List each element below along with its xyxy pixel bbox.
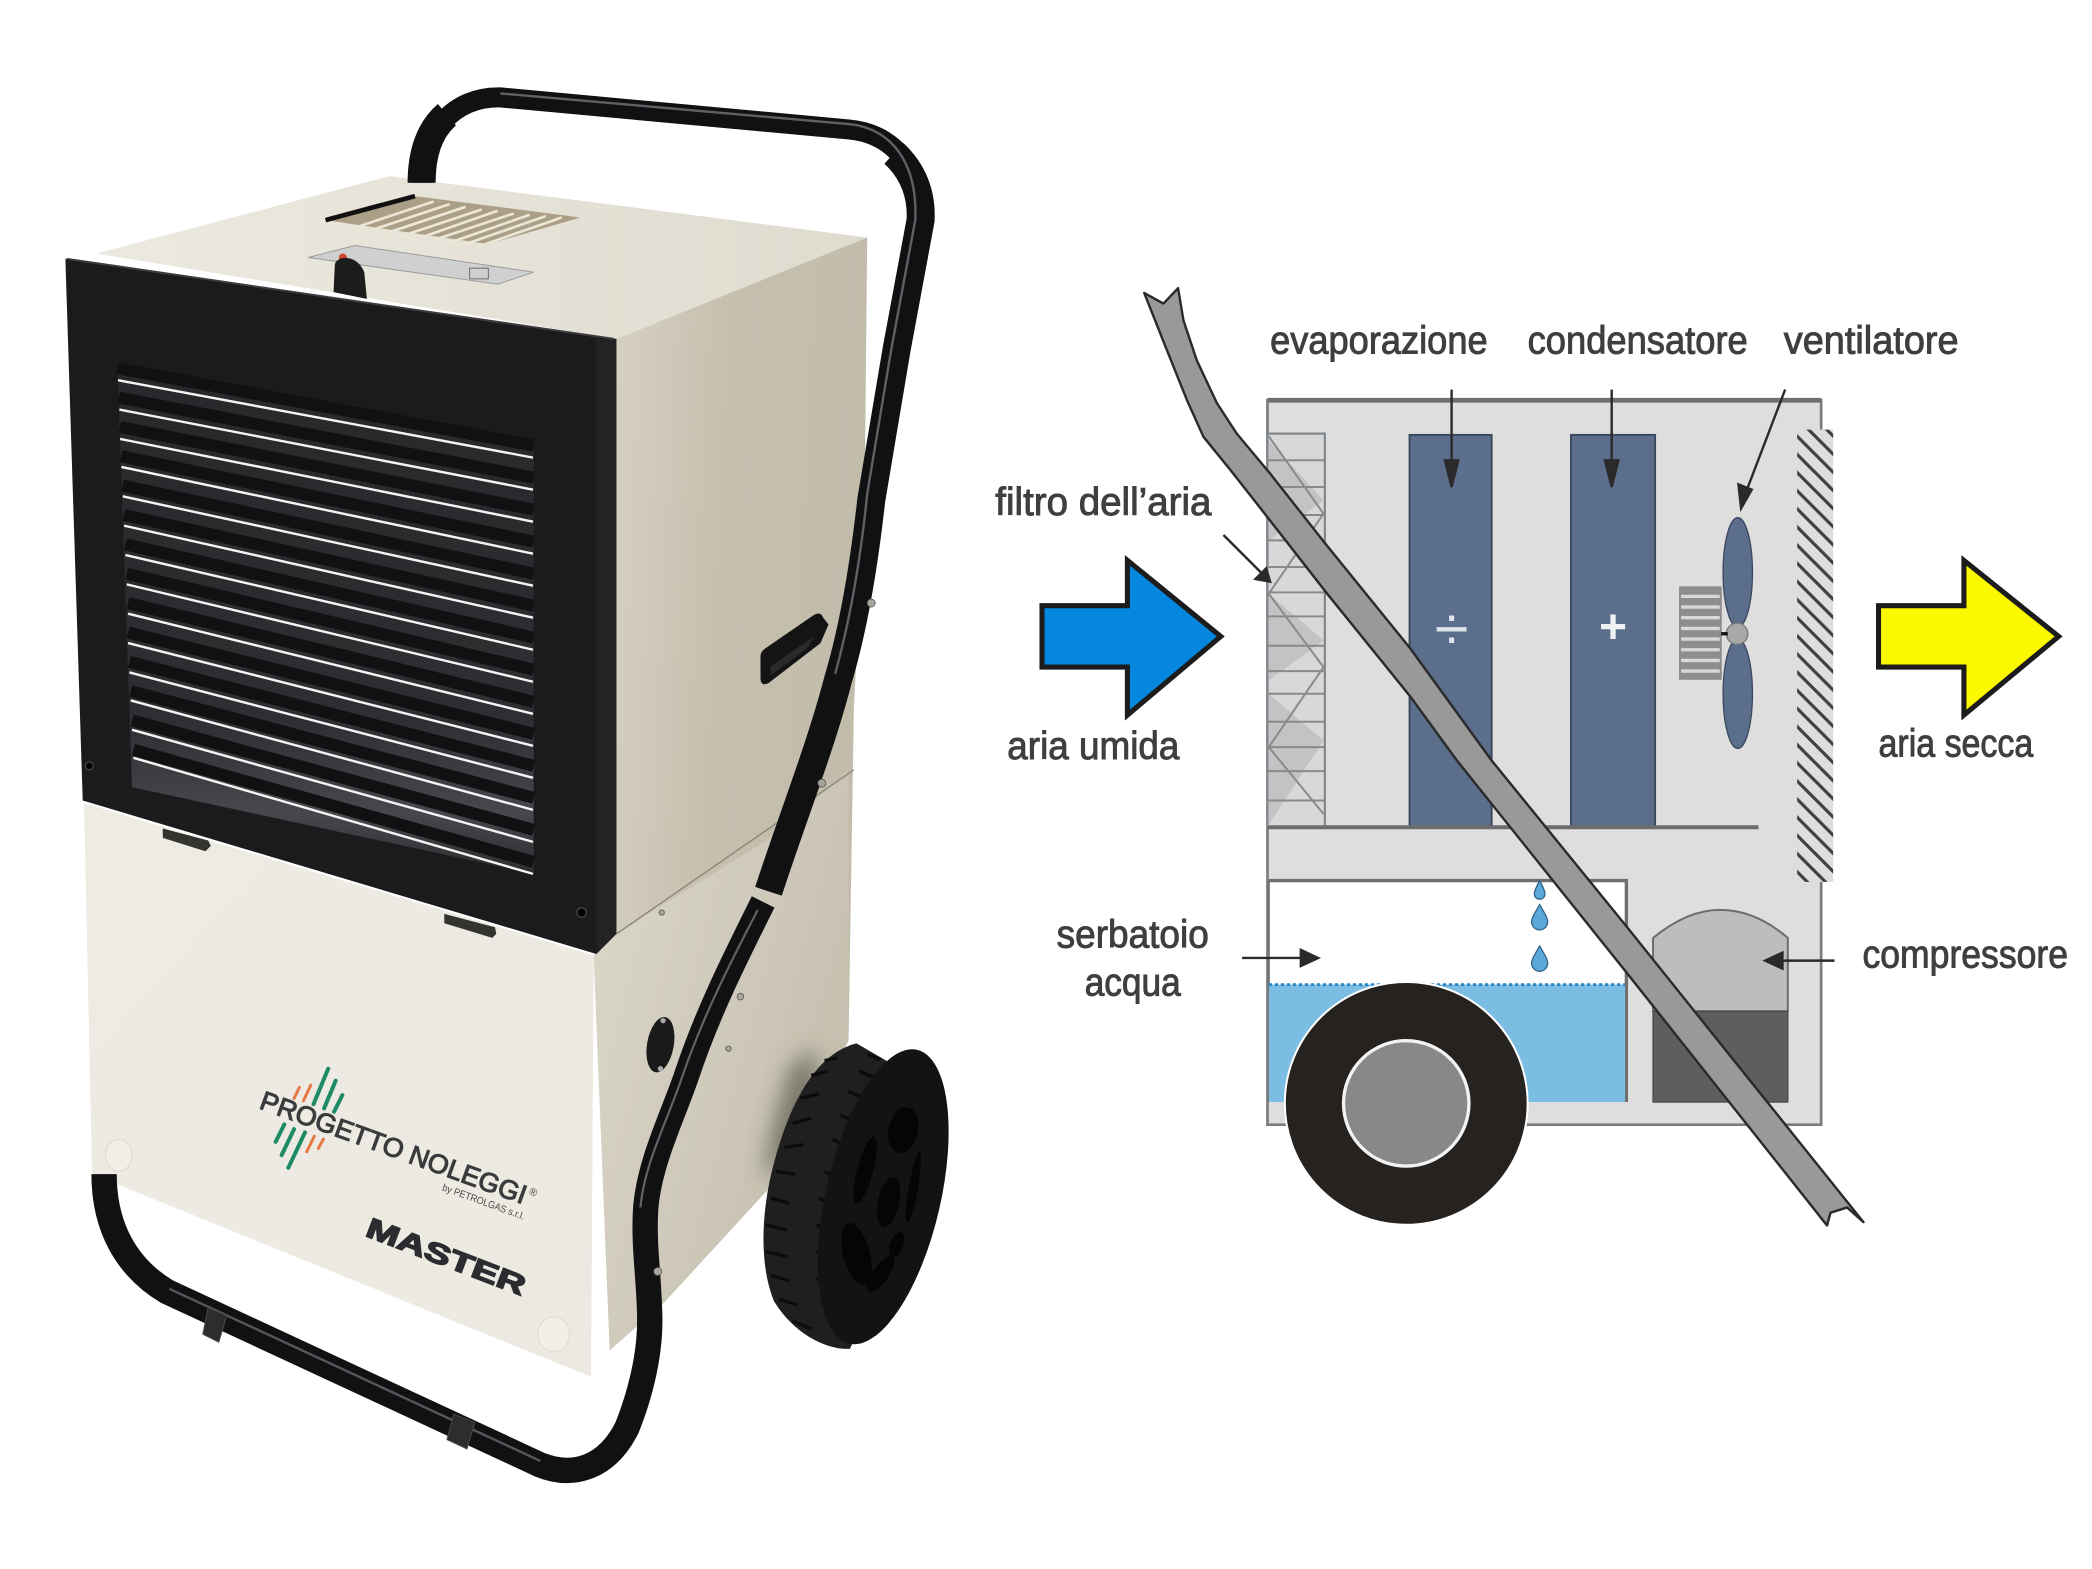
wheel face [793, 1037, 973, 1357]
side grip handle [760, 614, 829, 684]
front tube frame [104, 902, 763, 1470]
yellow arrow: dry air out [1879, 560, 2059, 715]
side face upper and lower [594, 237, 867, 1350]
label: condensatore: condensatore [1528, 319, 1748, 363]
label: compressore: compressore [1863, 932, 2068, 976]
logo stripes [276, 1069, 342, 1168]
shelf [1267, 826, 1758, 829]
label: serbatoio: serbatoio [1057, 912, 1209, 956]
top vent [326, 196, 580, 247]
connector [642, 1015, 678, 1075]
fan [1680, 518, 1752, 748]
diagram: dehumidifier schematic [995, 288, 2068, 1225]
motor [1680, 587, 1721, 679]
label: aria secca: aria secca [1879, 721, 2033, 765]
logo: Progetto Noleggi: by PETROLGAS s.r.l. [441, 1183, 526, 1223]
wheel holes [835, 1104, 924, 1296]
label: evaporazione: evaporazione [1270, 319, 1488, 363]
diagonal handle tube [1144, 288, 1863, 1225]
outlet grille hatching [1797, 430, 1833, 882]
water drops [1532, 881, 1548, 971]
label: acqua: acqua [1085, 960, 1181, 1004]
blue arrow: humid air in [1042, 560, 1221, 715]
divide sign: ÷ [1435, 595, 1468, 664]
wheel [1285, 982, 1528, 1225]
callout arrows [1223, 390, 1835, 969]
label: filtro dell'aria: filtro dell’aria [995, 480, 1212, 524]
condenser [1571, 435, 1655, 827]
screws [654, 599, 875, 1275]
plus sign: + [1599, 601, 1627, 654]
photo: dehumidifier [65, 93, 973, 1470]
water tank [1269, 881, 1626, 1102]
top edge [1267, 399, 1821, 402]
body [1267, 400, 1821, 1125]
wheel shadow on side [763, 1047, 817, 1181]
water [1269, 985, 1625, 1102]
panel bumps [105, 1139, 570, 1352]
control panel [308, 245, 534, 284]
logo: Progetto Noleggi: ® [527, 1186, 539, 1200]
lower side panel [594, 771, 849, 1350]
compressor [1653, 910, 1788, 1102]
logo: Progetto Noleggi: PROGETTO NOLEGGI [256, 1085, 531, 1210]
frame clips [203, 1308, 475, 1449]
upper handle tube [422, 93, 921, 891]
label: aria umida: aria umida [1007, 724, 1180, 768]
side seam [616, 770, 854, 934]
front panel bevel [596, 339, 616, 954]
label: ventilatore: ventilatore [1784, 319, 1959, 363]
tread [763, 1043, 921, 1349]
strap [334, 258, 367, 299]
air filter [1267, 434, 1325, 827]
lower front panel [84, 803, 594, 1377]
top edge of front panel [67, 259, 614, 339]
black front grille panel [65, 259, 616, 954]
top face [96, 176, 867, 339]
logo: Master: MASTER [362, 1212, 530, 1301]
evaporator [1410, 435, 1492, 827]
louvers [85, 366, 586, 917]
hinges [163, 829, 496, 938]
wheel [763, 1037, 973, 1357]
